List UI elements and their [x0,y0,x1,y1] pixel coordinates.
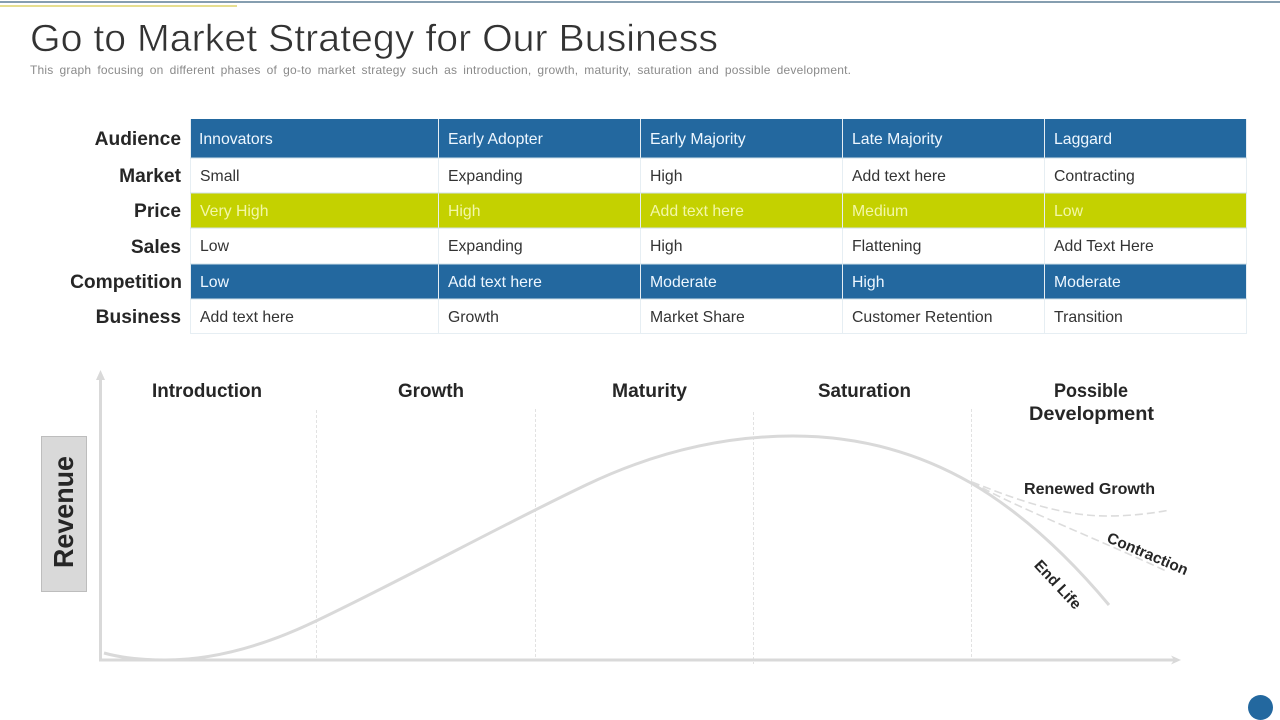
row: sales: High [650,238,682,255]
row: business [190,299,1247,334]
y axis arrow [96,370,105,661]
row labels: Business [96,307,181,328]
label: renewed growth: Renewed Growth [1024,481,1155,498]
page marker dot [1248,695,1273,720]
row: market [190,158,1247,193]
row: competition: Moderate [1054,274,1121,291]
phase headings: Development [1029,404,1155,425]
label: contraction: Contraction [1104,530,1190,579]
row labels: Sales [131,237,181,258]
row: price [190,193,1247,228]
possible development branches [972,482,1170,571]
row: competition: Moderate [650,274,717,291]
row: sales: Expanding [448,238,523,255]
y axis label: revenue [42,436,86,592]
phase headings: Growth [398,381,464,402]
y axis label: revenue: Revenue [48,456,79,568]
row: business: Customer Retention [852,309,992,326]
row: price: Low [1054,203,1084,220]
phase headings [152,381,1155,425]
row: market: Expanding [448,168,523,185]
title: Go to Market Strategy for Our Business [30,18,718,60]
row: price: High [448,203,480,220]
row: audience: Late Majority [852,131,943,148]
row: audience: Innovators [199,131,273,148]
row: sales: Low [200,238,230,255]
row: audience: Laggard [1054,131,1112,148]
row labels [70,129,182,328]
phase headings: Possible [1054,381,1128,402]
x axis arrow [99,656,1181,664]
row labels: Competition [70,272,182,293]
row: business: Market Share [650,309,745,326]
product life cycle curve [104,436,1109,660]
row: market: Small [200,168,240,185]
panel: revenue chart [42,370,1190,664]
row: market: Add text here [852,168,946,185]
row: market: Contracting [1054,168,1135,185]
row: sales: Add Text Here [1054,238,1154,255]
subtitle: This graph focusing on different phases of go-to market strategy such as introduction, growth, maturity, saturation and possible development. [30,63,851,77]
row labels: Market [119,166,182,187]
row: business: Add text here [200,309,294,326]
row: audience: Early Adopter [448,131,543,148]
row: competition: High [852,274,884,291]
row: audience: Early Majority [650,131,746,148]
row labels: Audience [95,129,181,150]
row: price: Add text here [650,203,744,220]
row: business: Transition [1054,309,1123,326]
row: competition: Add text here [448,274,542,291]
row labels: Price [134,201,181,222]
row: price: Medium [852,203,908,220]
row: price: Very High [200,203,268,220]
row: sales: Flattening [852,238,921,255]
panel: market table [70,119,1247,334]
row: market: High [650,168,682,185]
phase headings: Maturity [612,381,687,402]
row: audience [190,119,1247,158]
row: competition: Low [200,274,230,291]
row: business: Growth [448,309,499,326]
row: competition [190,264,1247,299]
row: sales [190,228,1247,264]
label: end life: End Life [1030,557,1085,613]
phase headings: Introduction [152,381,262,402]
phase headings: Saturation [818,381,911,402]
